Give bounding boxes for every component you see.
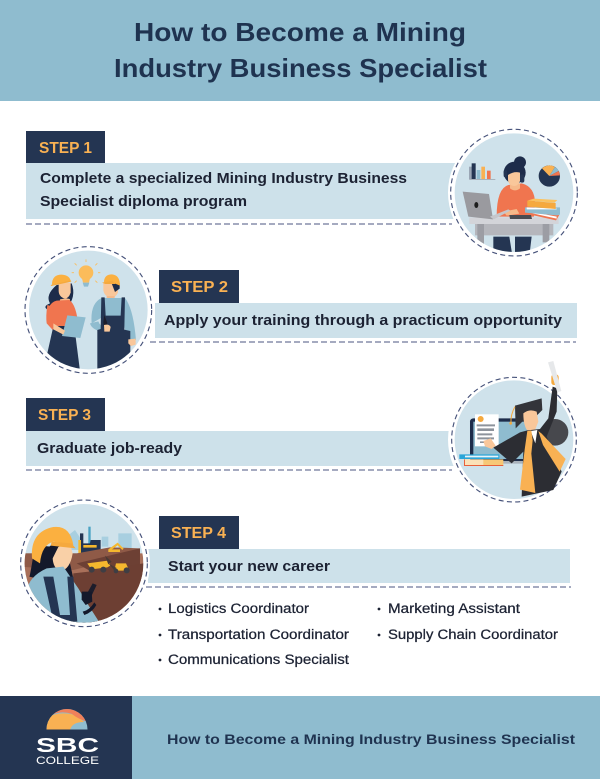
career list: [159, 601, 559, 667]
career list: Communications Specialist: [168, 652, 349, 667]
header banner: [0, 0, 600, 101]
icon: graduate with diploma: [448, 361, 580, 506]
step 3 badge: STEP 3: [38, 407, 91, 424]
step 2 description: Apply your training through a practicum opportunity: [164, 312, 563, 329]
step 1 description: [40, 170, 407, 210]
logo dome: [46, 708, 88, 730]
panel: step 2: [22, 244, 577, 376]
career list: Marketing Assistant: [388, 601, 520, 616]
step 2 badge: [159, 270, 239, 303]
career list: Logistics Coordinator: [168, 601, 310, 616]
SBC College logo: SBC: [36, 735, 99, 757]
step 2 text bar: [155, 303, 577, 338]
title: How to Become a Mining: [134, 17, 466, 47]
step 3 badge: [26, 398, 105, 431]
icon: two mining workers with light bulb: [22, 244, 154, 376]
step 4 badge: [159, 516, 239, 549]
step 3 text bar: [26, 431, 466, 466]
step 4 badge: STEP 4: [171, 525, 226, 542]
panel: step 1: [26, 127, 580, 259]
footer title: How to Become a Mining Industry Business Specialist: [167, 732, 576, 747]
step 2 badge: STEP 2: [171, 279, 228, 296]
panel: step 3: [26, 361, 580, 506]
step 1 description: Complete a specialized Mining Industry Business: [40, 170, 407, 187]
icon: worker at mine site: [18, 497, 150, 630]
icon: woman studying at laptop: [448, 127, 580, 259]
career list: Transportation Coordinator: [168, 627, 350, 642]
step 1 text bar: [26, 163, 466, 219]
step 1 description: Specialist diploma program: [40, 193, 247, 210]
title: [114, 17, 487, 83]
panel: step 4: [18, 497, 571, 667]
SBC College logo: COLLEGE: [36, 755, 99, 767]
step 1 badge: [26, 131, 105, 163]
step 3 description: Graduate job-ready: [37, 440, 183, 457]
title: Industry Business Specialist: [114, 53, 487, 83]
footer: [0, 696, 600, 779]
step 4 description: Start your new career: [168, 558, 330, 575]
career list: Supply Chain Coordinator: [388, 627, 559, 642]
SBC College logo: [0, 696, 132, 779]
step 4 text bar: [148, 549, 570, 583]
step 1 badge: STEP 1: [39, 140, 92, 157]
